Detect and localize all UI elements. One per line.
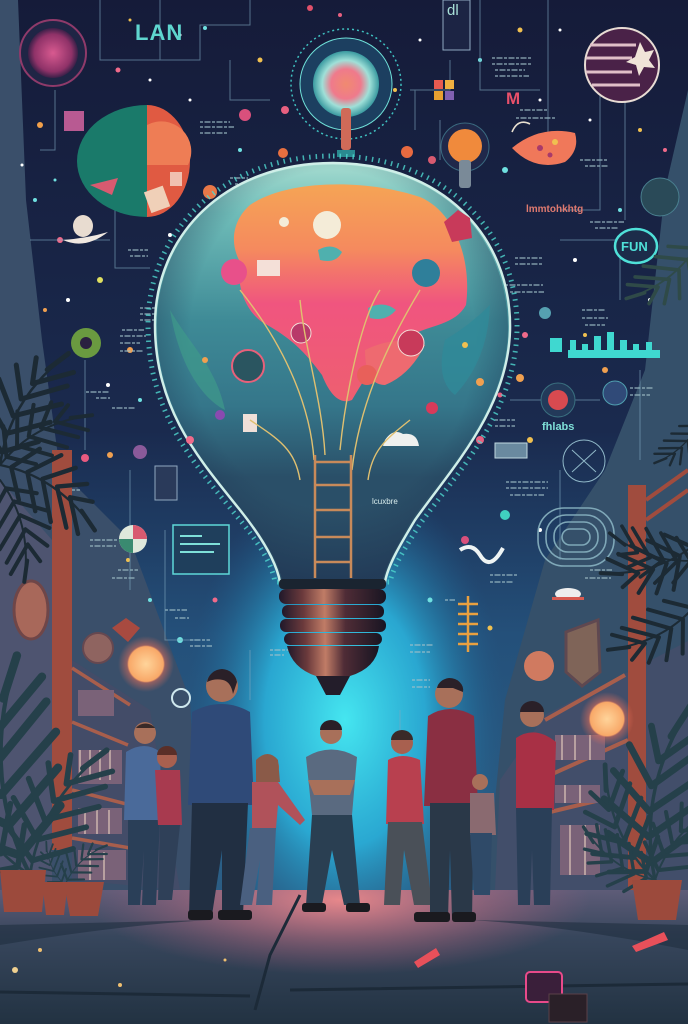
- icon: drone: [112, 618, 140, 642]
- person 2 woman left: [155, 746, 182, 900]
- icon: green ring: [71, 328, 101, 358]
- icon: glowing devices: [526, 972, 587, 1022]
- wires: [240, 290, 420, 480]
- person 1 far left: [124, 722, 162, 905]
- left wall plaques: [14, 581, 113, 663]
- land teal patches: [318, 246, 396, 319]
- person 4 woman center: [240, 754, 305, 905]
- bulb icons: [186, 210, 484, 446]
- text label right: lmmtohkhtg: [526, 204, 583, 215]
- plant left top: [0, 329, 119, 586]
- bulb base: [279, 579, 386, 695]
- label: fhlabs: [542, 421, 574, 433]
- icon: maze line art: [538, 508, 614, 566]
- glyph label: dl: [447, 2, 459, 19]
- icon: white cloud: [552, 588, 584, 600]
- left shelves: [0, 450, 180, 900]
- bulb glass: [155, 163, 510, 582]
- icon: pink orb top left: [20, 20, 86, 86]
- right wall: [485, 90, 688, 900]
- icon: pink square: [64, 111, 84, 131]
- left wall: [0, 0, 200, 900]
- person 5 center arms crossed: [302, 720, 370, 912]
- bulb rays: [148, 156, 517, 582]
- right shelves: [495, 470, 688, 905]
- floor: [0, 890, 688, 1024]
- icon: red marker center: [414, 948, 440, 968]
- right wall plaques: [524, 620, 600, 686]
- icon: teal badge: [615, 229, 657, 263]
- icon: crossed circle: [563, 440, 605, 482]
- pots left: [0, 870, 104, 916]
- icon: colorful fish shape: [512, 122, 576, 165]
- icon: orange bulb: [441, 123, 489, 188]
- person 9 far right: [516, 701, 556, 905]
- icon: glowing top bulb: [291, 29, 401, 157]
- text glyph top: [443, 0, 470, 50]
- plant left bottom: [0, 651, 122, 906]
- icon: ring: [172, 689, 190, 707]
- data panel left: [173, 525, 229, 574]
- scattered tech dots: [20, 5, 667, 692]
- pie chart left: [119, 525, 147, 553]
- pot right: [632, 880, 682, 920]
- label in bulb: lcuxbre: [372, 497, 398, 506]
- icon: dark orb right: [641, 178, 679, 216]
- icon: globe top right: [585, 28, 659, 102]
- colour squares: [434, 80, 454, 100]
- icon: small blue orb: [603, 381, 627, 405]
- person 3 tall front left: [188, 669, 254, 920]
- icon: teal badge: FUN: [621, 239, 648, 254]
- right lamp: [580, 692, 634, 746]
- left lamp: [118, 636, 174, 692]
- ladder: [315, 455, 351, 578]
- icon: orange ladder: [458, 596, 478, 652]
- person 7 tall right: [414, 678, 478, 922]
- circuit lines: [30, 0, 640, 780]
- icon: white squiggle: [460, 547, 503, 562]
- icon: red marker right: [632, 932, 668, 952]
- continent: [234, 184, 467, 401]
- label box: [495, 443, 527, 458]
- chart: pie top left: [77, 105, 191, 217]
- icon: white hat: [63, 215, 108, 244]
- icon: phone: [155, 466, 177, 500]
- land patches: [365, 341, 425, 385]
- land green: [170, 310, 225, 410]
- person 6 red: [384, 730, 432, 905]
- person 8 far back: [470, 774, 496, 895]
- plant right mid: [596, 411, 688, 688]
- bulb edge shade: [157, 165, 508, 580]
- label M: M: [506, 89, 520, 108]
- small text dashes: [60, 58, 654, 687]
- heading glyphs top: LAN: [135, 20, 183, 45]
- land right: [442, 305, 490, 395]
- icon: round red target: [541, 383, 575, 417]
- plant right top: [619, 225, 688, 328]
- bulb: [148, 156, 517, 582]
- plant right bottom: [557, 699, 688, 905]
- bar chart right: [550, 332, 660, 358]
